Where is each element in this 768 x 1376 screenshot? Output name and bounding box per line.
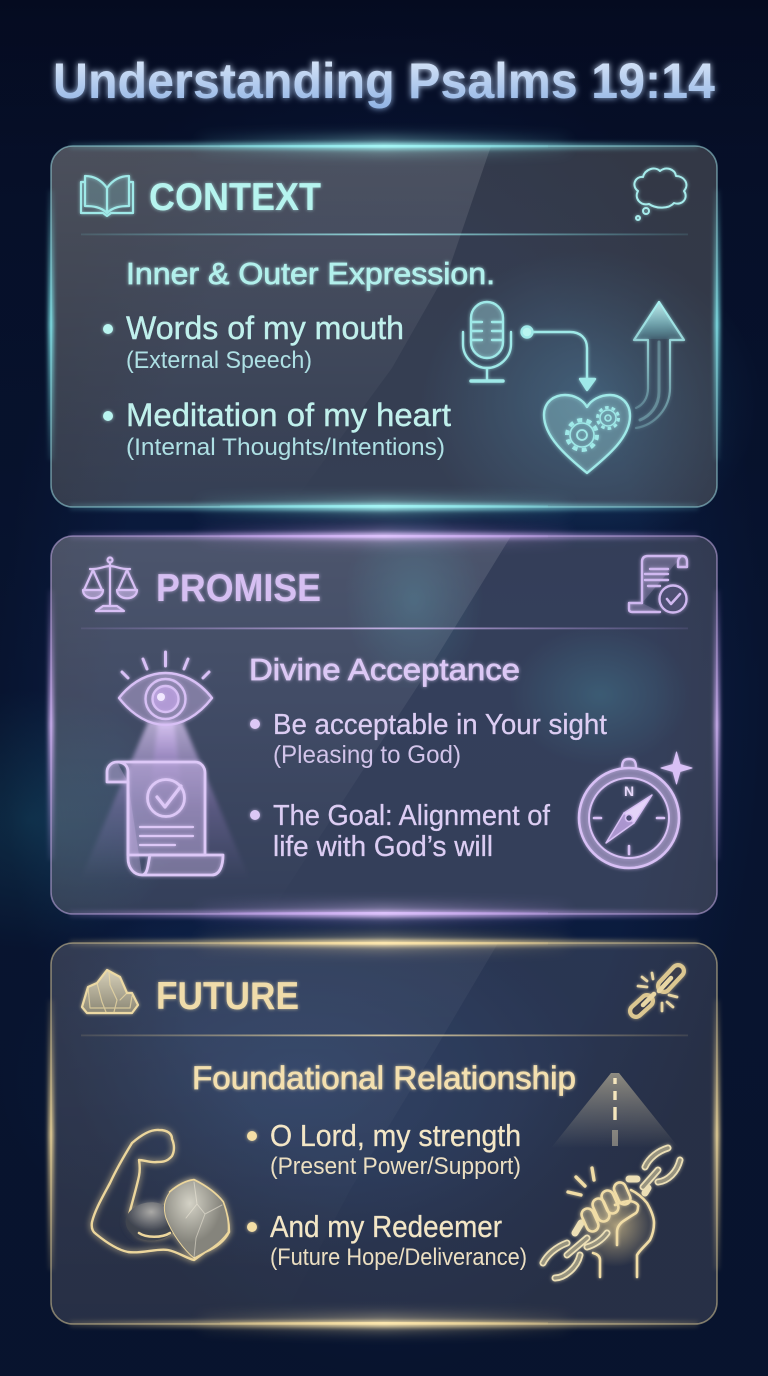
bullet: O Lord my strength: O Lord, my strength — [270, 1118, 521, 1153]
divider — [81, 628, 688, 629]
icon: flexed arm with rock — [92, 1130, 229, 1260]
icon: open book — [81, 176, 133, 216]
bullet: meditation of my heart — [103, 397, 451, 461]
icon: road to horizon — [551, 1073, 679, 1148]
icon: document with check — [629, 556, 687, 612]
divider — [81, 1034, 688, 1036]
light beam from eye — [80, 722, 250, 880]
icon: thought cloud — [634, 169, 686, 220]
bullet: words of my mouth: Words of my mouth — [126, 310, 404, 346]
panel glass background — [51, 536, 717, 914]
arrow: speech to heart — [522, 326, 595, 390]
panel: future — [48, 935, 720, 1330]
bullet: O Lord my strength — [247, 1118, 521, 1180]
bullet: O Lord my strength: (Present Power/Support) — [270, 1153, 521, 1180]
bullet: and my Redeemer — [247, 1209, 527, 1271]
bullet: and my Redeemer: And my Redeemer — [270, 1209, 502, 1244]
panel glowing frame — [48, 935, 720, 1330]
icon: compass with star — [579, 752, 692, 868]
panel: context — [48, 138, 720, 514]
fist and sparks — [568, 1168, 654, 1277]
icon: fist breaking chain — [543, 1148, 680, 1278]
panel glass background — [51, 146, 717, 507]
heading: PROMISE: PROMISE — [156, 567, 321, 610]
bullet: and my Redeemer: (Future Hope/Deliverance) — [270, 1244, 527, 1271]
heading: CONTEXT: CONTEXT — [149, 176, 321, 219]
icon: broken chain link — [636, 971, 678, 1011]
icon: balance scales — [83, 558, 137, 611]
bullet: the goal: life with God’s will — [273, 831, 493, 863]
bullet: words of my mouth: (External Speech) — [126, 347, 312, 374]
arrow: rising up — [634, 302, 684, 428]
divider — [81, 234, 688, 235]
heading: divine acceptance: Divine Acceptance — [249, 652, 520, 687]
panel glass background — [51, 943, 717, 1324]
bullet: be acceptable — [250, 709, 607, 769]
bullet: be acceptable: (Pleasing to God) — [273, 741, 461, 769]
panel glowing frame — [48, 138, 720, 514]
heading: FUTURE: FUTURE — [156, 975, 299, 1018]
icon: compass with star: N — [624, 783, 634, 799]
bullet: meditation of my heart: Meditation of my heart — [126, 397, 451, 433]
panel: promise — [48, 528, 720, 920]
icon: microphone — [463, 302, 511, 381]
bullet: be acceptable: Be acceptable in Your sight — [273, 709, 607, 741]
bullet: words of my mouth — [103, 310, 404, 374]
heading: inner and outer expression: Inner & Outer Expression. — [126, 256, 495, 291]
panel glowing frame — [48, 528, 720, 920]
bullet: the goal — [250, 800, 551, 863]
title: Understanding Psalms 19:14 — [53, 53, 715, 109]
icon: scroll with check — [107, 762, 223, 875]
heading: foundational relationship: Foundational Relationship — [192, 1060, 576, 1096]
bullet: meditation of my heart: (Internal Thoughts/Intentions) — [126, 434, 445, 461]
icon: rock — [82, 970, 138, 1013]
chain links — [543, 1148, 680, 1278]
bullet: the goal: The Goal: Alignment of — [273, 800, 551, 832]
icon: heart with gears — [544, 395, 630, 473]
icon: all-seeing eye — [119, 652, 212, 725]
